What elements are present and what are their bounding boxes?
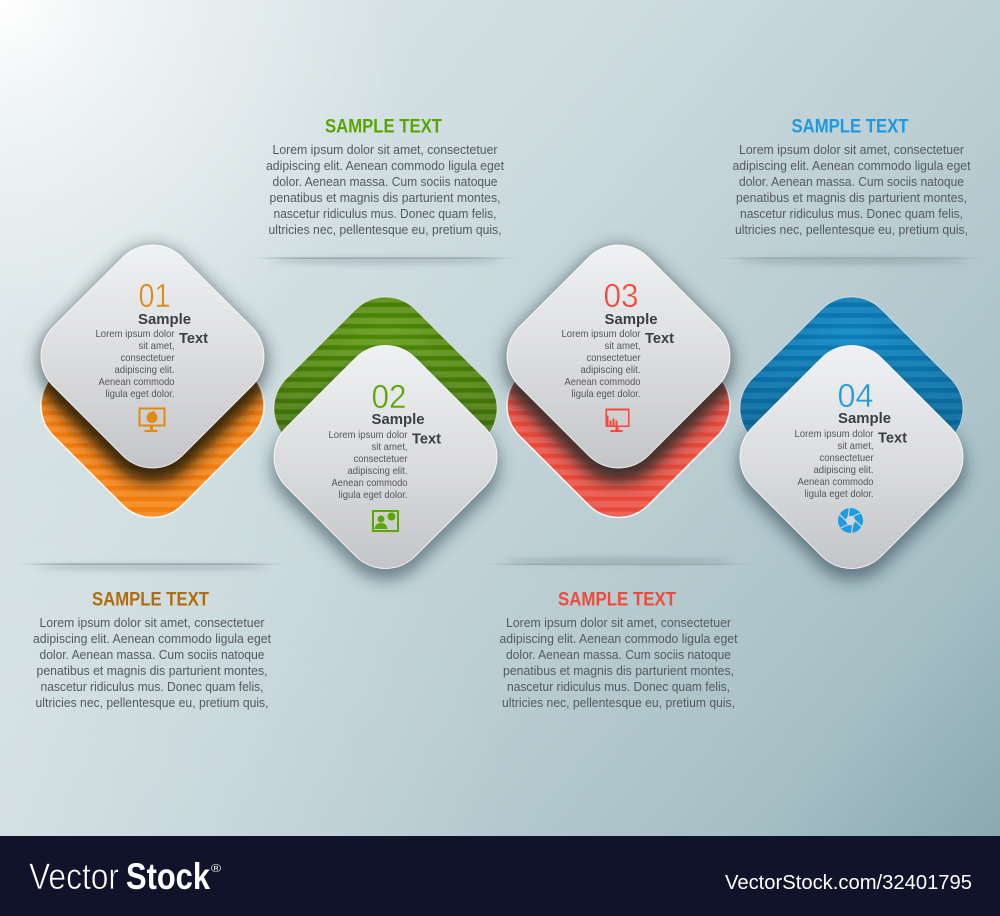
- card body text: Aenean commodo: [332, 478, 408, 489]
- card title: Text: [412, 430, 441, 448]
- shadow on red diamond: [507, 382, 730, 495]
- card body text: ligula eget dolor.: [572, 389, 640, 400]
- card body text: [96, 329, 175, 400]
- card title: Sample: [604, 311, 658, 328]
- paragraph: orange: dolor. Aenean massa. Cum sociis natoque: [40, 648, 264, 662]
- paragraph: blue: adipiscing elit. Aenean commodo ligula eget: [732, 159, 971, 173]
- card shadow: [41, 250, 264, 473]
- number 01: 01: [138, 277, 170, 314]
- paragraph: green: dolor. Aenean massa. Cum sociis natoque: [272, 175, 498, 189]
- icon: monitor with pie chart: [138, 408, 166, 432]
- card body text: sit amet,: [138, 341, 174, 352]
- paragraph: red: [500, 616, 738, 710]
- orange back diamond: [41, 294, 264, 518]
- white card: [740, 345, 963, 569]
- green back diamond: [274, 297, 497, 520]
- paragraph: blue: ultricies nec, pellentesque eu, pretium quis,: [735, 223, 968, 237]
- paragraph: red: adipiscing elit. Aenean commodo ligula eget: [500, 632, 738, 646]
- paragraph: blue: dolor. Aenean massa. Cum sociis natoque: [739, 175, 964, 189]
- step 01: orange: [41, 245, 264, 518]
- blue back diamond: [740, 297, 963, 520]
- paragraph: orange: nascetur ridiculus mus. Donec quam felis,: [40, 680, 264, 694]
- paragraph: red: nascetur ridiculus mus. Donec quam felis,: [507, 680, 730, 694]
- card body text: Aenean commodo: [798, 477, 874, 488]
- card title: Text: [878, 430, 907, 446]
- card title: [604, 311, 674, 347]
- paragraph: red: dolor. Aenean massa. Cum sociis natoque: [506, 648, 731, 662]
- step 03: red: [507, 245, 730, 518]
- card shadow: [274, 354, 497, 578]
- icon: monitor with bars: [606, 408, 630, 432]
- shelf line: blue block: [719, 258, 985, 264]
- card title: [138, 311, 208, 347]
- white card: [41, 245, 264, 468]
- white card: [507, 245, 730, 468]
- number 04: 04: [838, 377, 874, 414]
- card body text: consectetuer: [354, 454, 408, 465]
- footer bar: [0, 836, 1000, 916]
- shelf line: red block: [485, 558, 752, 565]
- card body text: sit amet,: [372, 442, 408, 453]
- card body text: adipiscing elit.: [348, 466, 408, 477]
- card shadow: [740, 354, 963, 578]
- paragraph: blue: Lorem ipsum dolor sit amet, consectetuer: [739, 143, 964, 157]
- shelf line: orange block: [18, 564, 285, 570]
- white card: [274, 345, 497, 569]
- logo: VectorStock: Stock: [126, 856, 210, 897]
- card body text: consectetuer: [120, 353, 175, 364]
- paragraph: green: penatibus et magnis dis parturient montes,: [270, 191, 500, 205]
- paragraph: orange: adipiscing elit. Aenean commodo ligula eget: [33, 632, 271, 646]
- card body text: Lorem ipsum dolor: [328, 430, 408, 441]
- paragraph: green: nascetur ridiculus mus. Donec quam felis,: [274, 207, 496, 221]
- card body text: Lorem ipsum dolor: [96, 329, 175, 340]
- card title: [372, 411, 441, 448]
- card body text: consectetuer: [586, 353, 641, 364]
- paragraph: orange: ultricies nec, pellentesque eu, pretium quis,: [36, 696, 268, 710]
- icon: presentation board: [372, 510, 399, 532]
- shadow on orange diamond: [41, 382, 264, 495]
- card title: Sample: [838, 410, 891, 427]
- card title: Sample: [372, 411, 424, 428]
- card body text: Aenean commodo: [564, 377, 641, 388]
- number 03: 03: [604, 277, 638, 314]
- paragraph: green: [266, 143, 504, 237]
- card body text: Aenean commodo: [98, 377, 175, 388]
- logo: VectorStock: Vector: [29, 856, 119, 897]
- paragraph: blue: nascetur ridiculus mus. Donec quam felis,: [740, 207, 963, 221]
- card body text: adipiscing elit.: [814, 465, 874, 476]
- heading: green: SAMPLE TEXT: [325, 116, 442, 138]
- text block: orange: [33, 588, 271, 710]
- card body text: adipiscing elit.: [114, 365, 174, 376]
- card body text: Lorem ipsum dolor: [562, 329, 641, 340]
- card body text: ligula eget dolor.: [804, 489, 874, 500]
- paragraph: red: ultricies nec, pellentesque eu, pretium quis,: [502, 696, 735, 710]
- paragraph: green: Lorem ipsum dolor sit amet, consectetuer: [272, 143, 498, 157]
- paragraph: red: Lorem ipsum dolor sit amet, consectetuer: [506, 616, 731, 630]
- card body text: [562, 329, 641, 400]
- paragraph: orange: penatibus et magnis dis parturient montes,: [36, 664, 268, 678]
- heading: orange: SAMPLE TEXT: [92, 588, 209, 610]
- card body text: sit amet,: [838, 441, 874, 452]
- card body text: [328, 430, 408, 501]
- text block: blue: [732, 116, 971, 237]
- icon: camera aperture: [838, 508, 863, 533]
- card title: Text: [645, 330, 674, 347]
- card shadow: [507, 250, 730, 473]
- card body text: ligula eget dolor.: [106, 389, 174, 400]
- heading: red: SAMPLE TEXT: [558, 588, 676, 610]
- text block: green: [266, 116, 504, 237]
- card body text: consectetuer: [820, 453, 874, 464]
- step 02: green: [274, 297, 497, 578]
- paragraph: blue: [732, 143, 971, 237]
- card title: Text: [179, 330, 208, 347]
- red back diamond: [507, 294, 730, 518]
- logo: VectorStock: [29, 856, 221, 897]
- card body text: adipiscing elit.: [580, 365, 640, 376]
- paragraph: green: ultricies nec, pellentesque eu, pretium quis,: [268, 223, 502, 237]
- shelf line: green block: [252, 258, 518, 264]
- card body text: Lorem ipsum dolor: [794, 429, 874, 440]
- card body text: [794, 429, 874, 500]
- card body text: sit amet,: [604, 341, 640, 352]
- card title: Sample: [138, 311, 191, 328]
- paragraph: orange: Lorem ipsum dolor sit amet, consectetuer: [40, 616, 264, 630]
- text block: red: [500, 588, 738, 710]
- paragraph: red: penatibus et magnis dis parturient montes,: [503, 664, 734, 678]
- heading: blue: SAMPLE TEXT: [792, 116, 909, 138]
- paragraph: blue: penatibus et magnis dis parturient montes,: [736, 191, 967, 205]
- image id url: VectorStock.com/32401795: [725, 872, 972, 894]
- card body text: ligula eget dolor.: [338, 490, 408, 501]
- number 02: 02: [372, 378, 406, 415]
- paragraph: orange: [33, 616, 271, 710]
- card title: [838, 410, 907, 446]
- step 04: blue: [740, 297, 963, 578]
- paragraph: green: adipiscing elit. Aenean commodo ligula eget: [266, 159, 504, 173]
- logo: VectorStock: ®: [211, 863, 221, 875]
